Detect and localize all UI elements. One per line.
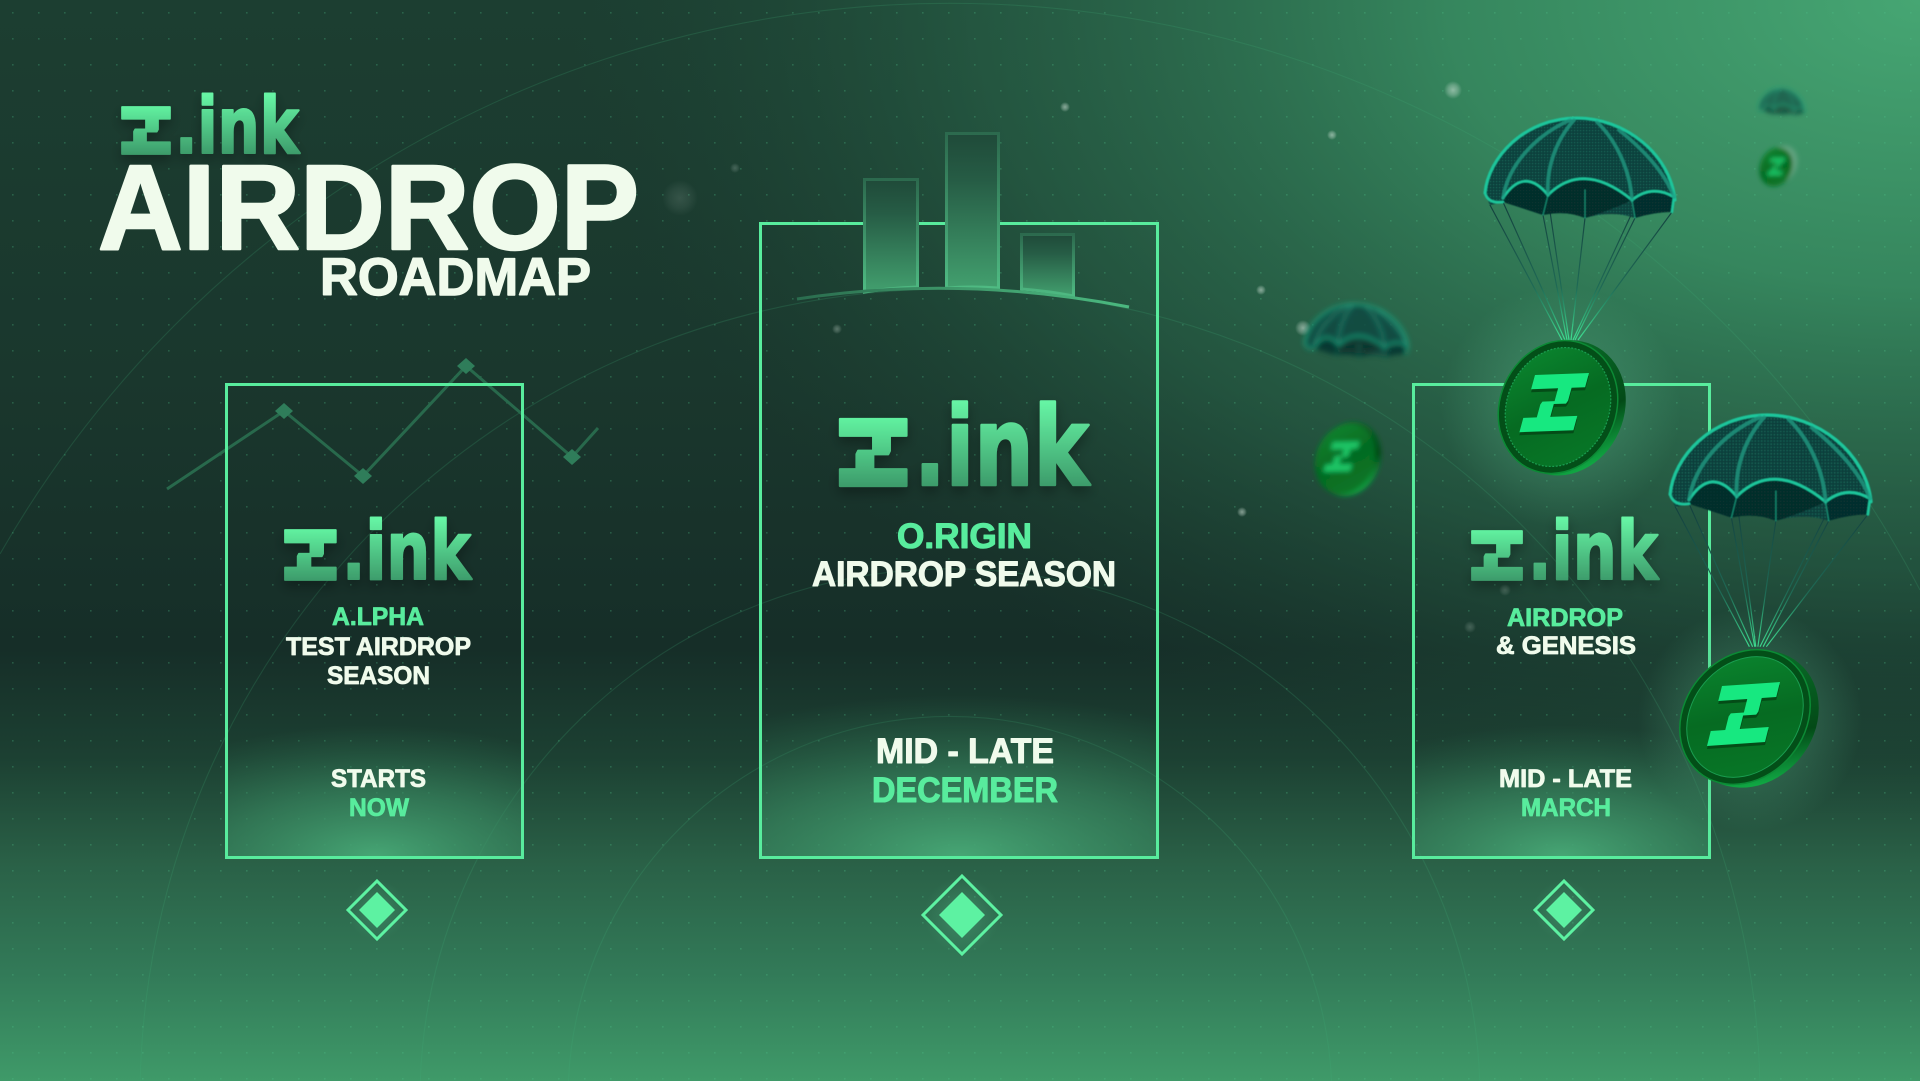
heading: AIRDROP: AIRDROP [98,139,639,275]
card title [1496,604,1636,660]
card date: MARCH [1521,794,1611,822]
icon: parachute with coin 2 [1638,415,1871,832]
card glow [227,725,523,857]
card border [760,224,1158,858]
icon: blurred parachute mid [1305,304,1408,357]
coin [1653,623,1846,815]
logo [285,505,473,599]
card date: MID - LATE [1499,765,1632,793]
icon: parachute with coin 1 [1477,118,1675,495]
parachute canopy [1670,415,1871,521]
icon: diamond marker 3 [1534,880,1594,940]
logo: .ink [342,505,473,599]
coin glow [1441,287,1681,527]
card glow [1414,725,1710,857]
parachute canopy [1485,118,1675,218]
icon: far blurred parachute top right [1758,88,1805,115]
panel: airdrop and genesis [1414,287,1710,858]
icon: diamond marker 1 [347,880,407,940]
title block [98,82,639,307]
line chart [167,358,598,489]
card date: MID - LATE [876,732,1054,771]
icon: diamond marker 2 [923,876,1001,954]
panel: alpha test airdrop season [167,358,598,858]
card date: DECEMBER [872,771,1058,810]
card date [331,765,426,822]
card date: STARTS [331,765,426,793]
card border [1414,384,1710,858]
card date: NOW [349,794,409,822]
panel: origin airdrop season [760,134,1158,858]
card border [226,384,522,858]
parachute strings [1490,198,1672,340]
card title [286,603,471,690]
card date [1499,765,1632,822]
logo: .ink [914,383,1091,511]
card title: SEASON [327,662,430,690]
card title [812,517,1116,594]
floating particles [662,81,1511,633]
logo [1472,505,1660,599]
icon: blurred coin mid [1305,412,1392,506]
bar chart [797,134,1129,307]
card title: A.LPHA [332,603,424,631]
logo: .ink [1528,505,1660,599]
card date [872,732,1058,810]
parachute strings [1675,500,1868,647]
card title: AIRDROP [1507,604,1623,632]
title logo [122,82,301,172]
card title: & GENESIS [1496,632,1636,660]
title logo: .ink [175,82,301,172]
heading: ROADMAP: ROADMAP [320,248,591,307]
card title: AIRDROP SEASON [812,555,1116,594]
icon: far blurred coin top right [1754,141,1803,192]
coin glow [1638,608,1862,832]
logo [840,383,1091,511]
card title: O.RIGIN [897,517,1032,556]
card glow [761,695,1157,857]
card title: TEST AIRDROP [286,633,471,661]
coin [1477,321,1647,495]
